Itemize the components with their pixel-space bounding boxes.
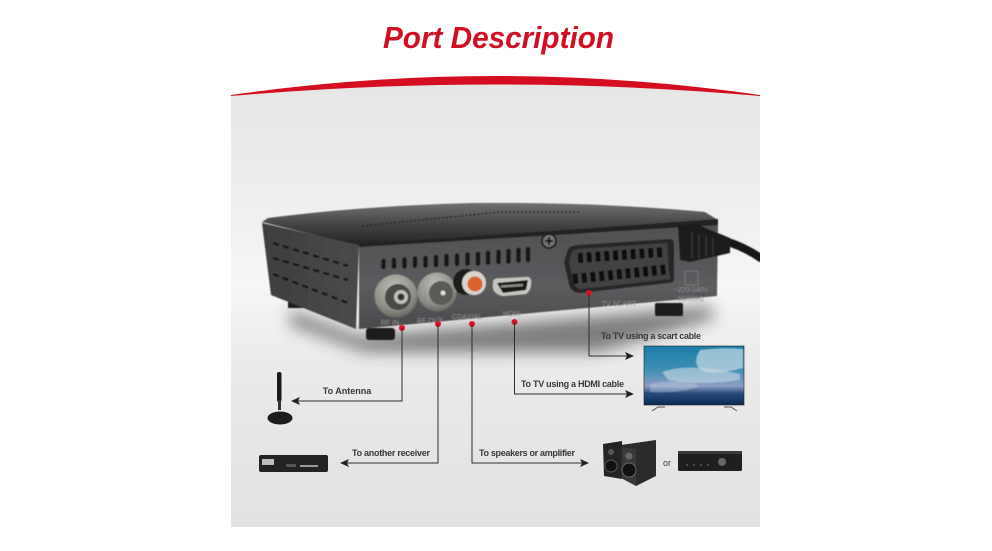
port labels: HDMI xyxy=(503,311,521,318)
SCART port xyxy=(564,239,674,293)
port labels: RF IN xyxy=(381,320,399,327)
coaxial port xyxy=(453,269,486,295)
front vents xyxy=(384,249,528,267)
connector: HDMI to TV xyxy=(512,319,634,398)
side vents xyxy=(273,243,348,303)
power label: 50/60Hz xyxy=(678,296,705,303)
power label xyxy=(674,271,709,303)
RF OUT port xyxy=(418,272,456,312)
port labels xyxy=(381,301,637,327)
top cover xyxy=(262,203,718,246)
port labels: COAXIAL xyxy=(452,314,482,321)
connector: antenna: To Antenna xyxy=(323,386,372,396)
connector: speakers or amplifier xyxy=(469,321,589,467)
icon: amplifier xyxy=(678,451,742,471)
HDMI port xyxy=(493,277,531,296)
icon: speakers xyxy=(603,440,656,486)
side panel xyxy=(262,223,359,329)
set-top box device xyxy=(262,203,762,340)
power label: ~220-240V xyxy=(674,287,709,294)
power cable xyxy=(678,224,762,262)
icon: antenna xyxy=(268,372,292,424)
top vent dots xyxy=(362,212,580,226)
port labels: TV SCART xyxy=(602,301,637,308)
title: Port Description xyxy=(383,20,614,55)
port labels: RF OUT xyxy=(417,318,444,325)
connector: HDMI to TV: To TV using a HDMI cable xyxy=(521,379,624,389)
connector: SCART to TV: To TV using a scart cable xyxy=(601,331,701,341)
feet xyxy=(288,298,683,340)
text: or: or xyxy=(663,458,671,468)
background panel xyxy=(231,84,760,527)
RF IN port xyxy=(374,274,418,318)
front face xyxy=(359,224,718,329)
connector: SCART to TV xyxy=(586,290,701,360)
connector: another receiver: To another receiver xyxy=(352,448,430,458)
icon: television xyxy=(644,346,744,411)
connector: speakers or amplifier: To speakers or amplifier xyxy=(479,448,575,458)
device shadow xyxy=(290,306,715,352)
connector: antenna xyxy=(291,325,405,405)
icon: receiver xyxy=(259,455,328,472)
connector: another receiver xyxy=(340,321,441,467)
screw xyxy=(541,233,557,249)
red arc header xyxy=(231,76,760,96)
